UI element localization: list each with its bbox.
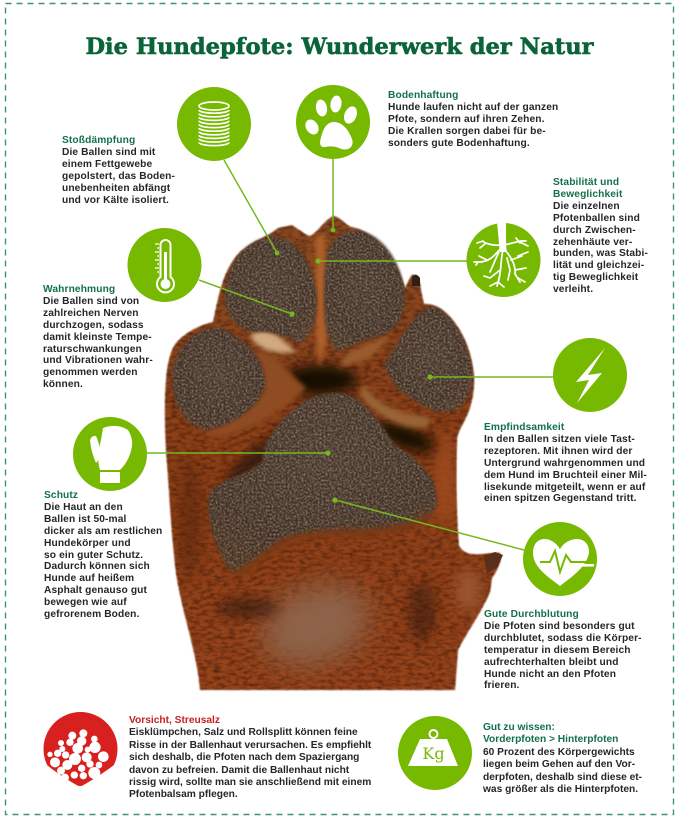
text: Stoßdämpfung: gepolstert, das Boden- [62,171,175,182]
icon: heart with pulse [523,522,597,596]
text: Schutz: Hunde auf heißem [44,573,134,584]
text: Schutz: so ein guter Schutz. [44,550,143,561]
toe nail [412,275,420,286]
pointer: Bodenhaftung [331,159,335,232]
text: Wahrnehmung: zahlreichen Nerven [43,308,139,319]
text: Empfindsamkeit: Empfindsamkeit [484,422,564,433]
text: Gute Durchblutung: aufrechterhalten bleibt und [484,657,619,668]
text: Gute Durchblutung: Die Pfoten sind besonders gut [484,621,635,632]
text: Gute Durchblutung: Hunde nicht an den Pfoten [484,669,616,680]
icon: roots [466,222,540,297]
pointer: Empfindsamkeit [427,374,554,380]
text: Stabilität und Beweglichkeit: zehenhäute ver- [553,237,632,248]
text: Vorsicht, Streusalz [129,715,372,800]
text: Stabilität und Beweglichkeit [553,177,648,295]
text: Gute Durchblutung: durchblutet, sodass die Körper- [484,633,642,644]
pad: left toe [225,237,317,344]
text: Gut zu wissen: was größer als die Hinterpfoten. [483,784,638,795]
pad: left outer [172,328,265,430]
text: Gut zu wissen: liegen beim Gehen auf den Vor- [483,759,635,770]
text: Stabilität und Beweglichkeit: Die einzelnen [553,201,620,212]
text: Bodenhaftung: sonders gute Bodenhaftung. [388,138,530,149]
fur shading [178,234,480,680]
dewclaw tip [484,552,503,573]
text: Bodenhaftung: Die Krallen sorgen dabei für be- [388,126,546,137]
text: Wahrnehmung: genommen werden [43,367,138,378]
text: Stoßdämpfung: einem Fettgewebe [62,159,152,170]
text: Schutz: Ballen ist 50-mal [44,514,126,525]
text: Bodenhaftung [388,90,558,149]
text: Empfindsamkeit: rezeptoren. Mit ihnen wird der [484,446,633,457]
text: Stoßdämpfung [62,135,175,206]
text: Stabilität und Beweglichkeit: Stabilität und [553,177,619,188]
text: Wahrnehmung: können. [43,379,83,390]
text: Vorsicht, Streusalz: sich deshalb, die Pfoten nach dem Spaziergang [129,752,359,763]
text: Vorsicht, Streusalz: davon zu befreien. Damit die Ballenhaut nicht [129,765,349,776]
text: Wahrnehmung: Die Ballen sind von [43,296,139,307]
text: Empfindsamkeit [484,422,647,504]
text: Vorsicht, Streusalz: rissig wird, sollte man sie anschließend mit einem [129,777,371,788]
text: Stoßdämpfung: Stoßdämpfung [62,135,135,146]
icon: spring [177,87,251,161]
text: Gute Durchblutung: Gute Durchblutung [484,609,579,620]
text: Stabilität und Beweglichkeit: bunden, was Stabi- [553,248,648,259]
text: Gute Durchblutung [484,609,642,691]
text: Wahrnehmung: Wahrnehmung [43,284,115,295]
text: Empfindsamkeit: In den Ballen sitzen viele Tast- [484,434,635,445]
pointer: Schutz [146,450,331,456]
text: Stoßdämpfung: Die Ballen sind mit [62,147,155,158]
main pad lower edge blending into fur [234,514,432,575]
text: Stabilität und Beweglichkeit: verleiht. [553,284,593,295]
text: Stabilität und Beweglichkeit: lität und gleichzei- [553,260,644,271]
text: Empfindsamkeit: dem Hund im Bruchteil einer Mil- [484,470,647,481]
text: Gut zu wissen: Vorderpfoten > Hinterpfoten [483,734,618,745]
text: Empfindsamkeit: einen spitzen Gegenstand tritt. [484,493,637,504]
text: Bodenhaftung: Bodenhaftung [388,90,458,101]
text: Schutz: Dadurch können sich [44,561,150,572]
text: Empfindsamkeit: Untergrund wahrgenommen und [484,458,645,469]
text: Schutz: bewegen wie auf [44,597,127,608]
fur silhouette [165,216,501,690]
pointer: Durchblutung [332,497,524,550]
text: Schutz: gefrorenem Boden. [44,609,139,620]
text: Stabilität und Beweglichkeit: Beweglichkeit [553,189,622,200]
text: Stoßdämpfung: und vor Kälte isoliert. [62,195,169,206]
pointer: Wahrnehmung [199,280,295,317]
text: Wahrnehmung: und Vibrationen wahr- [43,355,153,366]
text: Schutz [44,490,162,620]
text: Wahrnehmung: damit kleinste Tempe- [43,332,152,343]
text: Gut zu wissen: 60 Prozent des Körpergewichts [483,747,635,758]
text: Vorsicht, Streusalz: Pfotenbalsam pflegen. [129,789,238,800]
text: Vorsicht, Streusalz: Risse in der Ballenhaut verursachen. Es empfiehlt [129,740,371,751]
icon: thermometer [128,228,202,302]
text: Schutz: Hundekörper und [44,538,131,549]
icon: Kg weight [398,716,472,790]
pad: right toe [324,231,405,351]
text: Schutz: Die Haut an den [44,502,123,513]
paw photograph illustration [165,216,503,690]
text: Schutz: Asphalt genauso gut [44,585,147,596]
text: Wahrnehmung [43,284,153,390]
pointer: Stabilität [315,258,467,264]
text: Empfindsamkeit: lisekunde mitgeteilt, wenn er auf [484,482,645,493]
icon: paw print [296,85,370,159]
icon: lightning bolt [553,338,627,412]
text: Stabilität und Beweglichkeit: tig Beweglichkeit [553,272,638,283]
icon: Kg weight: Kg [422,744,445,763]
text: Wahrnehmung: raturschwankungen [43,344,142,355]
pointer lines and dots [146,159,554,550]
text: Bodenhaftung: Hunde laufen nicht auf der ganzen [388,102,558,113]
title: Die Hundepfote: Wunderwerk der Natur [86,34,594,60]
pointer: Stoßdämpfung [224,160,279,255]
text: Stoßdämpfung: unebenheiten abfängt [62,183,170,194]
text: Gut zu wissen: Gut zu wissen: [483,722,555,733]
text: Schutz: dicker als am restlichen [44,526,162,537]
text: Stabilität und Beweglichkeit: durch Zwischen- [553,225,636,236]
text: Bodenhaftung: Pfote, sondern auf ihren Zehen. [388,114,545,125]
icon: mitten [73,417,147,491]
pad: right outer [385,307,473,412]
text: Gute Durchblutung: frieren. [484,680,520,691]
text: Stabilität und Beweglichkeit: Pfotenballen sind [553,213,640,224]
icon: road salt rocks [43,712,118,792]
text: Vorsicht, Streusalz: Vorsicht, Streusalz [129,715,220,726]
text: Gut zu wissen [483,722,642,795]
text: Wahrnehmung: durchzogen, sodass [43,320,144,331]
text: Vorsicht, Streusalz: Eisklümpchen, Salz und Rollsplitt können feine [129,727,358,738]
pad: main [208,393,437,573]
text: Gute Durchblutung: temperatur in diesem Bereich [484,645,631,656]
text: Schutz: Schutz [44,490,78,501]
text: Gut zu wissen: derpfoten, deshalb sind diese et- [483,772,642,783]
